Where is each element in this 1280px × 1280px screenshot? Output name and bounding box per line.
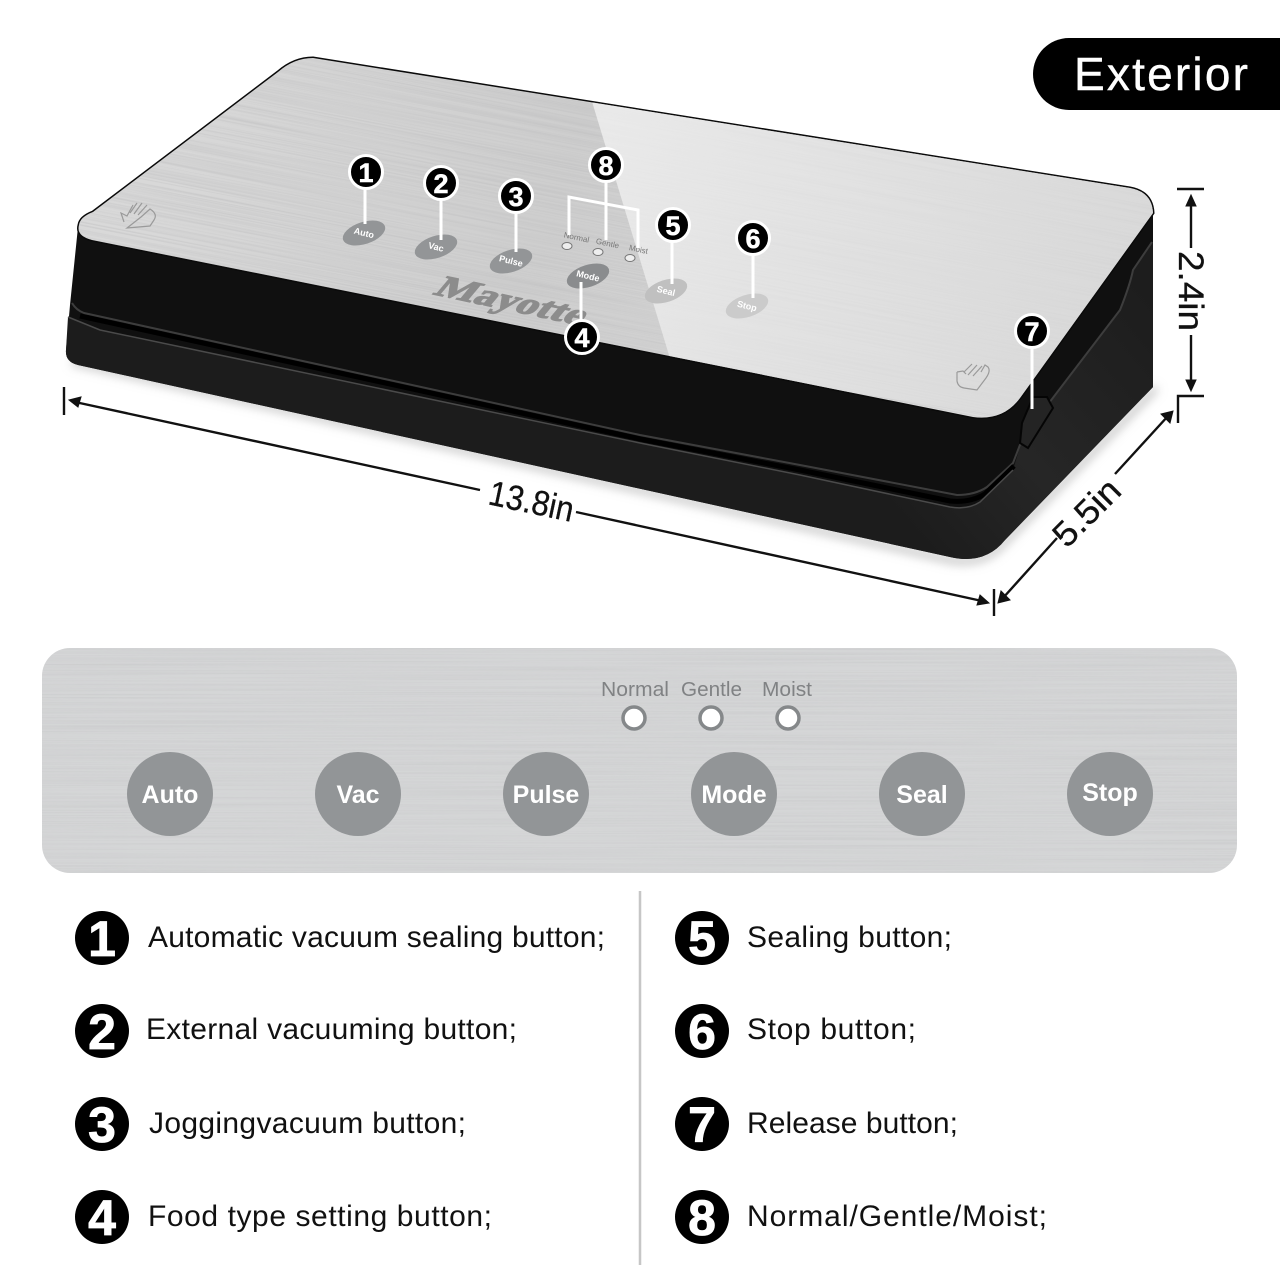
- callout 2: 2: [433, 169, 449, 199]
- legend 4: Food type setting button;: [148, 1200, 492, 1233]
- panel button: Pulse: Pulse: [498, 253, 524, 269]
- seam: [68, 242, 1152, 508]
- legend 5: [675, 911, 952, 967]
- legend 1: 1: [88, 911, 116, 967]
- legend 3: Joggingvacuum button;: [149, 1107, 466, 1140]
- dimension: 5.5in: [998, 411, 1173, 603]
- callout 4: 4: [574, 323, 590, 353]
- button: Vac: Vac: [336, 781, 380, 809]
- button: Stop: Stop: [1082, 779, 1138, 807]
- panel button: Mode: [564, 259, 612, 293]
- panel button: Vac: [412, 230, 460, 264]
- dimension: 5.5in: 5.5in: [1045, 471, 1129, 555]
- hand icon left: [121, 203, 155, 228]
- callout 3: 3: [508, 182, 524, 212]
- panel button: Auto: [340, 216, 388, 250]
- callout 5: [656, 208, 690, 284]
- panel: control panel close-up: [42, 648, 1237, 873]
- panel button: Pulse: [487, 244, 535, 278]
- legend 7: Release button;: [747, 1107, 958, 1140]
- indicator lights: [562, 230, 650, 262]
- legend 2: 2: [88, 1004, 116, 1060]
- legend 6: [675, 1004, 916, 1060]
- legend 8: 8: [688, 1190, 716, 1246]
- legend 5: 5: [688, 911, 716, 967]
- callout 6: 6: [745, 224, 761, 254]
- callout 4: [566, 282, 598, 354]
- panel button: Seal: Seal: [656, 284, 676, 298]
- legend 3: [75, 1097, 466, 1153]
- dimension: 13.8in: 13.8in: [485, 474, 578, 530]
- callout 5: 5: [665, 211, 681, 241]
- legend 6: 6: [688, 1004, 716, 1060]
- legend 2: [75, 1004, 517, 1060]
- button: Auto: [127, 752, 213, 836]
- button: Pulse: Pulse: [513, 781, 579, 809]
- panel button: Auto: Auto: [353, 226, 376, 240]
- legend 7: 7: [688, 1097, 716, 1153]
- device body silhouette: [66, 213, 1153, 559]
- release latch: [1020, 397, 1053, 448]
- indicator label: Normal: Normal: [601, 679, 669, 701]
- label: Exterior: Exterior: [1074, 48, 1248, 100]
- indicator lights: Gentle: [595, 237, 621, 251]
- indicator LEDs: [623, 707, 799, 729]
- button: Stop: [1067, 752, 1153, 836]
- label: Exterior: [1033, 38, 1280, 110]
- button: Seal: Seal: [896, 781, 948, 809]
- panel button: Vac: Vac: [427, 240, 445, 254]
- legend 8: Normal/Gentle/Moist;: [747, 1200, 1047, 1233]
- button: Mode: Mode: [701, 781, 767, 809]
- legend 8: [675, 1190, 1047, 1246]
- button: Pulse: [503, 752, 589, 836]
- logo Mayotte: Mayotte: [427, 270, 598, 332]
- legend 5: Sealing button;: [747, 921, 952, 954]
- button: Auto: Auto: [142, 781, 198, 809]
- legend 3: 3: [88, 1097, 116, 1153]
- indicator lights: Normal: [563, 230, 590, 245]
- indicator lights: Moist: [628, 243, 650, 256]
- callout 7: [1016, 314, 1048, 409]
- indicator label: Moist: Moist: [762, 679, 812, 701]
- device: vacuum sealer: [66, 56, 1160, 570]
- callout 3: [500, 180, 532, 252]
- dimension: 13.8in: [64, 387, 994, 616]
- callout 6: [736, 222, 770, 298]
- button: Seal: [879, 752, 965, 836]
- top plate: [77, 56, 1154, 418]
- legend 7: [675, 1097, 958, 1153]
- callout 1: 1: [358, 158, 374, 188]
- callout 8: 8: [598, 151, 614, 181]
- panel button: Mode: Mode: [575, 268, 601, 284]
- callout 1: [350, 156, 382, 224]
- dimension: 2.4in: [1171, 189, 1210, 423]
- callout 2: [424, 166, 458, 240]
- dimension: 2.4in: 2.4in: [1171, 251, 1210, 331]
- panel button: Stop: [723, 289, 771, 323]
- legend 1: Automatic vacuum sealing button;: [148, 921, 605, 954]
- panel button: Seal: [642, 274, 690, 308]
- legend divider: [639, 891, 641, 1265]
- panel button: Stop: Stop: [736, 299, 758, 313]
- indicator label: Gentle: Gentle: [681, 679, 742, 701]
- legend 1: [75, 911, 605, 967]
- device shadow: [72, 362, 1156, 561]
- legend 6: Stop button;: [747, 1013, 916, 1046]
- legend 2: External vacuuming button;: [146, 1013, 517, 1046]
- lower body and side face: [66, 242, 1153, 559]
- callout 7: 7: [1024, 317, 1040, 347]
- button: Mode: [691, 752, 777, 836]
- legend 4: [75, 1190, 492, 1246]
- legend 4: 4: [88, 1190, 116, 1246]
- callout 8: [569, 148, 638, 248]
- button: Vac: [315, 752, 401, 836]
- hand icon right: [957, 364, 989, 390]
